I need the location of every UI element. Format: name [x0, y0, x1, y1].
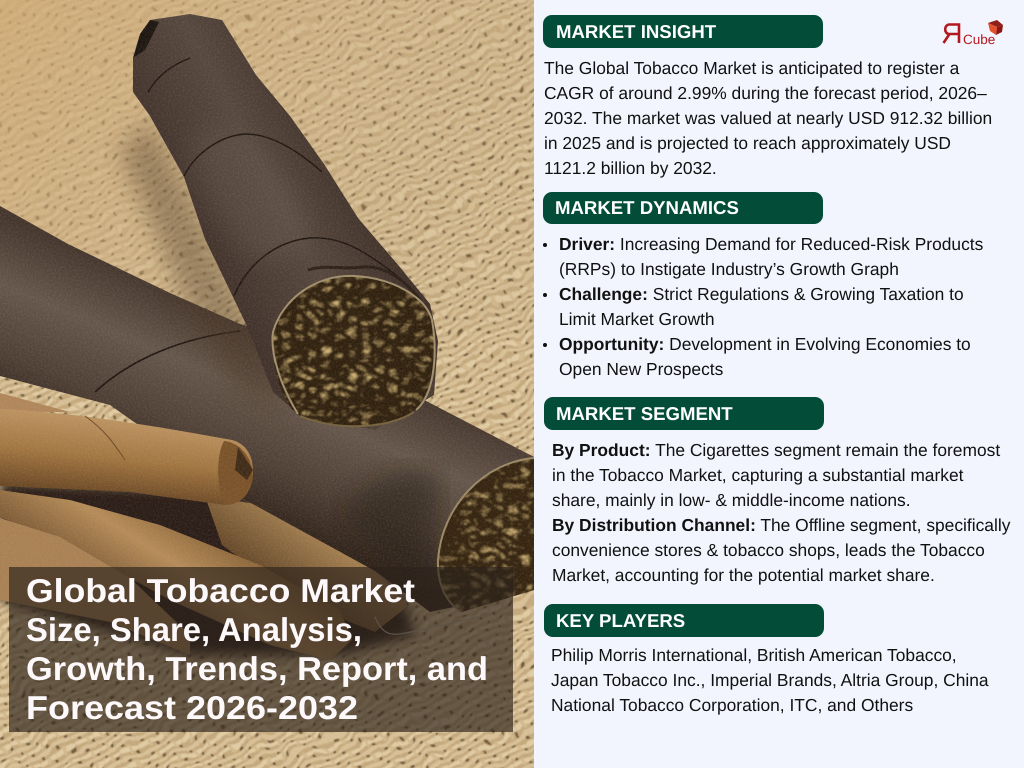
text: market insight: The Global Tobacco Market is anticipated to register a [544, 58, 959, 78]
panel: market insight [543, 15, 992, 178]
text: dynamics list: Open New Prospects [559, 359, 723, 379]
grain texture [0, 0, 534, 768]
heading: key players: KEY PLAYERS [556, 610, 685, 631]
text: dynamics list: Challenge: Strict Regulations & Growing Taxation to [559, 284, 964, 304]
bullets [543, 243, 547, 347]
text: market insight: 1121.2 billion by 2032. [544, 158, 717, 178]
dark cigar left [0, 206, 534, 612]
title: Global Tobacco Market [26, 572, 415, 609]
text: key players: Philip Morris International, British American Tobacco, [551, 645, 957, 665]
shadow beneath cigars [0, 480, 415, 655]
title: Size, Share, Analysis, [26, 611, 362, 648]
text: segment: share, mainly in low- & middle-income nations. [552, 490, 911, 510]
cigar top end: tobacco [272, 274, 436, 428]
panel: market dynamics [543, 192, 983, 379]
panel: market segment [544, 397, 1010, 585]
text: market insight: 2032. The market was valued at nearly USD 912.32 billion [544, 108, 992, 128]
text: segment: convenience stores & tobacco shops, leads the Tobacco [552, 540, 985, 560]
heading: market insight: MARKET INSIGHT [556, 21, 716, 42]
text: dynamics list [559, 234, 983, 379]
text: key players: Japan Tobacco Inc., Imperial Brands, Altria Group, China [551, 670, 989, 690]
heading: market segment: MARKET SEGMENT [556, 403, 733, 424]
heading: market dynamics: MARKET DYNAMICS [555, 197, 739, 218]
text: key players [551, 645, 989, 715]
text: segment: By Distribution Channel: The Offline segment, specifically [552, 515, 1010, 535]
title: Growth, Trends, Report, and [26, 650, 488, 687]
title: Forecast 2026-2032 [26, 689, 358, 726]
heading: market segment [544, 397, 824, 430]
text: segment: By Product: The Cigarettes segment remain the foremost [552, 440, 1000, 460]
logo: RCube: Cube [963, 32, 995, 47]
upper tan cigar [0, 393, 253, 505]
text: market insight: CAGR of around 2.99% during the forecast period, 2026– [544, 83, 987, 103]
heading: market insight [543, 15, 823, 48]
text: market insight [544, 58, 992, 178]
dark cigar end [436, 457, 534, 613]
text: market insight: in 2025 and is projected to reach approximately USD [544, 133, 951, 153]
burlap background [0, 0, 570, 768]
tan cigar middle [0, 490, 352, 660]
text: dynamics list: Limit Market Growth [559, 309, 715, 329]
text: segment: in the Tobacco Market, capturing a substantial market [552, 465, 963, 485]
title [26, 572, 488, 726]
panel: key players [544, 604, 989, 715]
text: dynamics list: Driver: Increasing Demand for Reduced-Risk Products [559, 234, 983, 254]
text: dynamics list: Opportunity: Development in Evolving Economies to [559, 334, 971, 354]
text: segment: Market, accounting for the potential market share. [552, 565, 935, 585]
text: segment [552, 440, 1010, 585]
heading: key players [544, 604, 824, 637]
dark cigar top [133, 14, 438, 430]
logo: RCube [942, 20, 1003, 47]
photo: cigars on burlap [0, 0, 534, 768]
tobacco strand [375, 615, 490, 634]
tan cigar behind [205, 496, 408, 632]
text: key players: National Tobacco Corporation, ITC, and Others [551, 695, 913, 715]
text: dynamics list: (RRPs) to Instigate Industry’s Growth Graph [559, 259, 899, 279]
shadow of top cigar [120, 120, 290, 420]
title band [9, 567, 513, 732]
tan cigar lower left [0, 518, 190, 655]
heading: market dynamics [543, 192, 823, 224]
